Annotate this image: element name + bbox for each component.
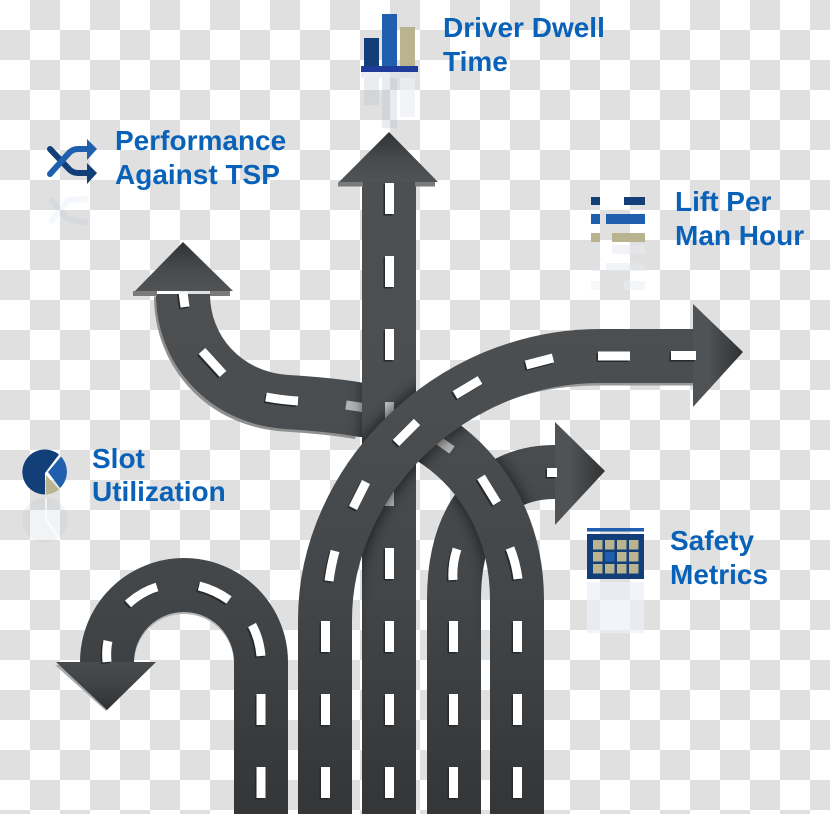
- label: Driver Dwell Time: Driver Dwell: [443, 12, 605, 43]
- label: Performance Against TSP: Performance: [115, 125, 286, 156]
- label: Performance Against TSP: Against TSP: [115, 159, 280, 190]
- label: Slot Utilization: Utilization: [92, 476, 226, 507]
- icon: calendar: [587, 528, 644, 633]
- label: Safety Metrics: Safety: [670, 525, 754, 556]
- label: Driver Dwell Time: Time: [443, 46, 508, 77]
- icon: list bars: [591, 197, 645, 290]
- road: curve to upper-left arrow: [133, 242, 518, 814]
- label: Safety Metrics: Metrics: [670, 559, 768, 590]
- road: U-turn arrow: [55, 585, 261, 814]
- label: Slot Utilization: Slot: [92, 443, 145, 474]
- label: Lift Per Man Hour: Lift Per: [675, 186, 771, 217]
- road: straight up arrow: [338, 132, 438, 814]
- icon: bar chart: [361, 14, 418, 128]
- icon: pie chart: [22, 450, 68, 542]
- icon: shuffle arrows: [50, 139, 97, 223]
- label: Lift Per Man Hour: Man Hour: [675, 220, 804, 251]
- road: short curve to right arrow: [451, 422, 605, 814]
- road: big curve to right arrow: [324, 304, 743, 814]
